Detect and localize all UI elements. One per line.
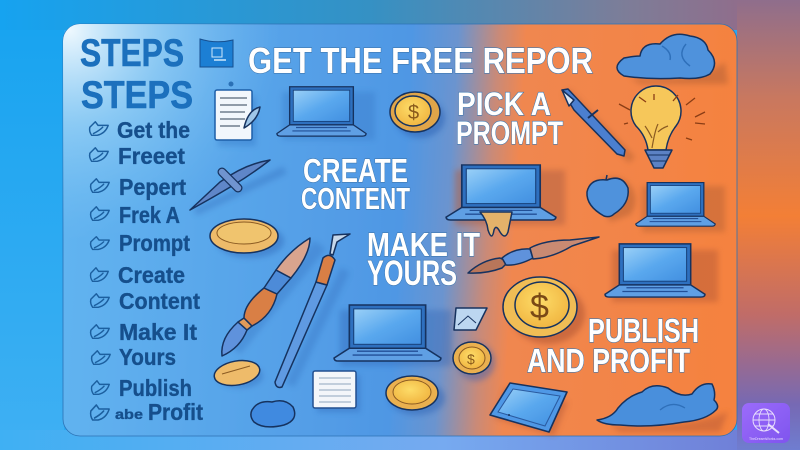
list item: Prompt: Prompt (119, 230, 190, 256)
label: pick a prompt: PROMPT (456, 115, 563, 151)
label: create content: CREATE (303, 152, 408, 189)
list item: Get the: Get the (117, 117, 190, 143)
list item: Pepert: Pepert (119, 174, 186, 200)
icon: paper note (313, 371, 360, 412)
icon: small paper (454, 308, 487, 330)
label: make it yours (367, 226, 480, 293)
icon: large coin (503, 277, 585, 344)
list item: Yours (92, 344, 176, 370)
icon: laptop lower right (605, 244, 718, 302)
icon: coin bottom center (386, 376, 445, 415)
step list (90, 117, 203, 425)
list item: Get the (90, 117, 190, 143)
icon: laptop bottom (334, 305, 452, 366)
label: create content (301, 152, 410, 216)
list item: Create (91, 262, 185, 288)
sidebar title: steps: STEPS (80, 32, 184, 75)
icon: blob (251, 401, 295, 427)
list item: Frek A (91, 202, 180, 228)
label: publish and profit: PUBLISH (588, 312, 699, 349)
icon: fountain pen (562, 89, 632, 160)
badge: globe cursor (742, 403, 790, 443)
icon: paint brush right (275, 234, 350, 387)
sidebar title: steps (80, 32, 193, 117)
list item: Pepert (91, 174, 186, 200)
label: pick a prompt (456, 86, 563, 151)
icon: document with feather (215, 82, 260, 146)
list item: Content: Content (119, 288, 200, 314)
icon: pen diagonal (190, 160, 285, 212)
icon: coin top: $ (408, 102, 419, 124)
list item: Create: Create (118, 262, 185, 288)
icon: small coin left (212, 357, 263, 389)
icon: apple (587, 175, 636, 222)
icon: blue flag (200, 39, 233, 67)
label: make it yours: YOURS (367, 254, 457, 293)
icon: cloud top right (617, 34, 728, 84)
label: publish and profit: AND PROFIT (527, 342, 690, 379)
icon: laptop center with drip (446, 165, 565, 236)
icon: large coin: $ (530, 288, 549, 326)
icon: horizontal paint brush (468, 237, 599, 273)
icon: tablet (490, 383, 568, 436)
icon: coin top (390, 92, 445, 138)
icon: laptop top left (277, 87, 375, 140)
icon: laptop right (636, 183, 725, 232)
icon: lightbulb (619, 86, 705, 168)
list item: Publish: Publish (119, 375, 192, 401)
icon: small coin center: $ (467, 351, 475, 367)
main heading: GET THE FREE REPOR (248, 40, 593, 81)
label: pick a prompt: PICK A (457, 86, 551, 122)
list item: abe Profit (91, 399, 203, 425)
list item: Prompt (91, 230, 190, 256)
list item: Make It: Make It (119, 319, 197, 345)
list item: Yours: Yours (119, 344, 176, 370)
icon: cloud bottom right (597, 384, 728, 432)
icon: small coin center (453, 342, 495, 381)
badge: globe cursor: TheDreamWorks.com (749, 437, 783, 441)
icon: coin left (210, 219, 284, 258)
list item: Freeet: Freeet (118, 143, 185, 169)
label: publish and profit (527, 312, 699, 379)
label: create content: CONTENT (301, 181, 410, 216)
icon: paint brush left (222, 238, 320, 356)
list item: Freeet (90, 143, 185, 169)
sidebar title: steps: STEPS (81, 74, 193, 117)
label: make it yours: MAKE IT (367, 226, 480, 263)
list item: abe Profit: Profit (148, 399, 203, 425)
list item: Publish (92, 375, 192, 401)
list item: abe Profit: abe (115, 406, 143, 422)
panel: main card (63, 24, 737, 436)
list item: Frek A: Frek A (119, 202, 180, 228)
